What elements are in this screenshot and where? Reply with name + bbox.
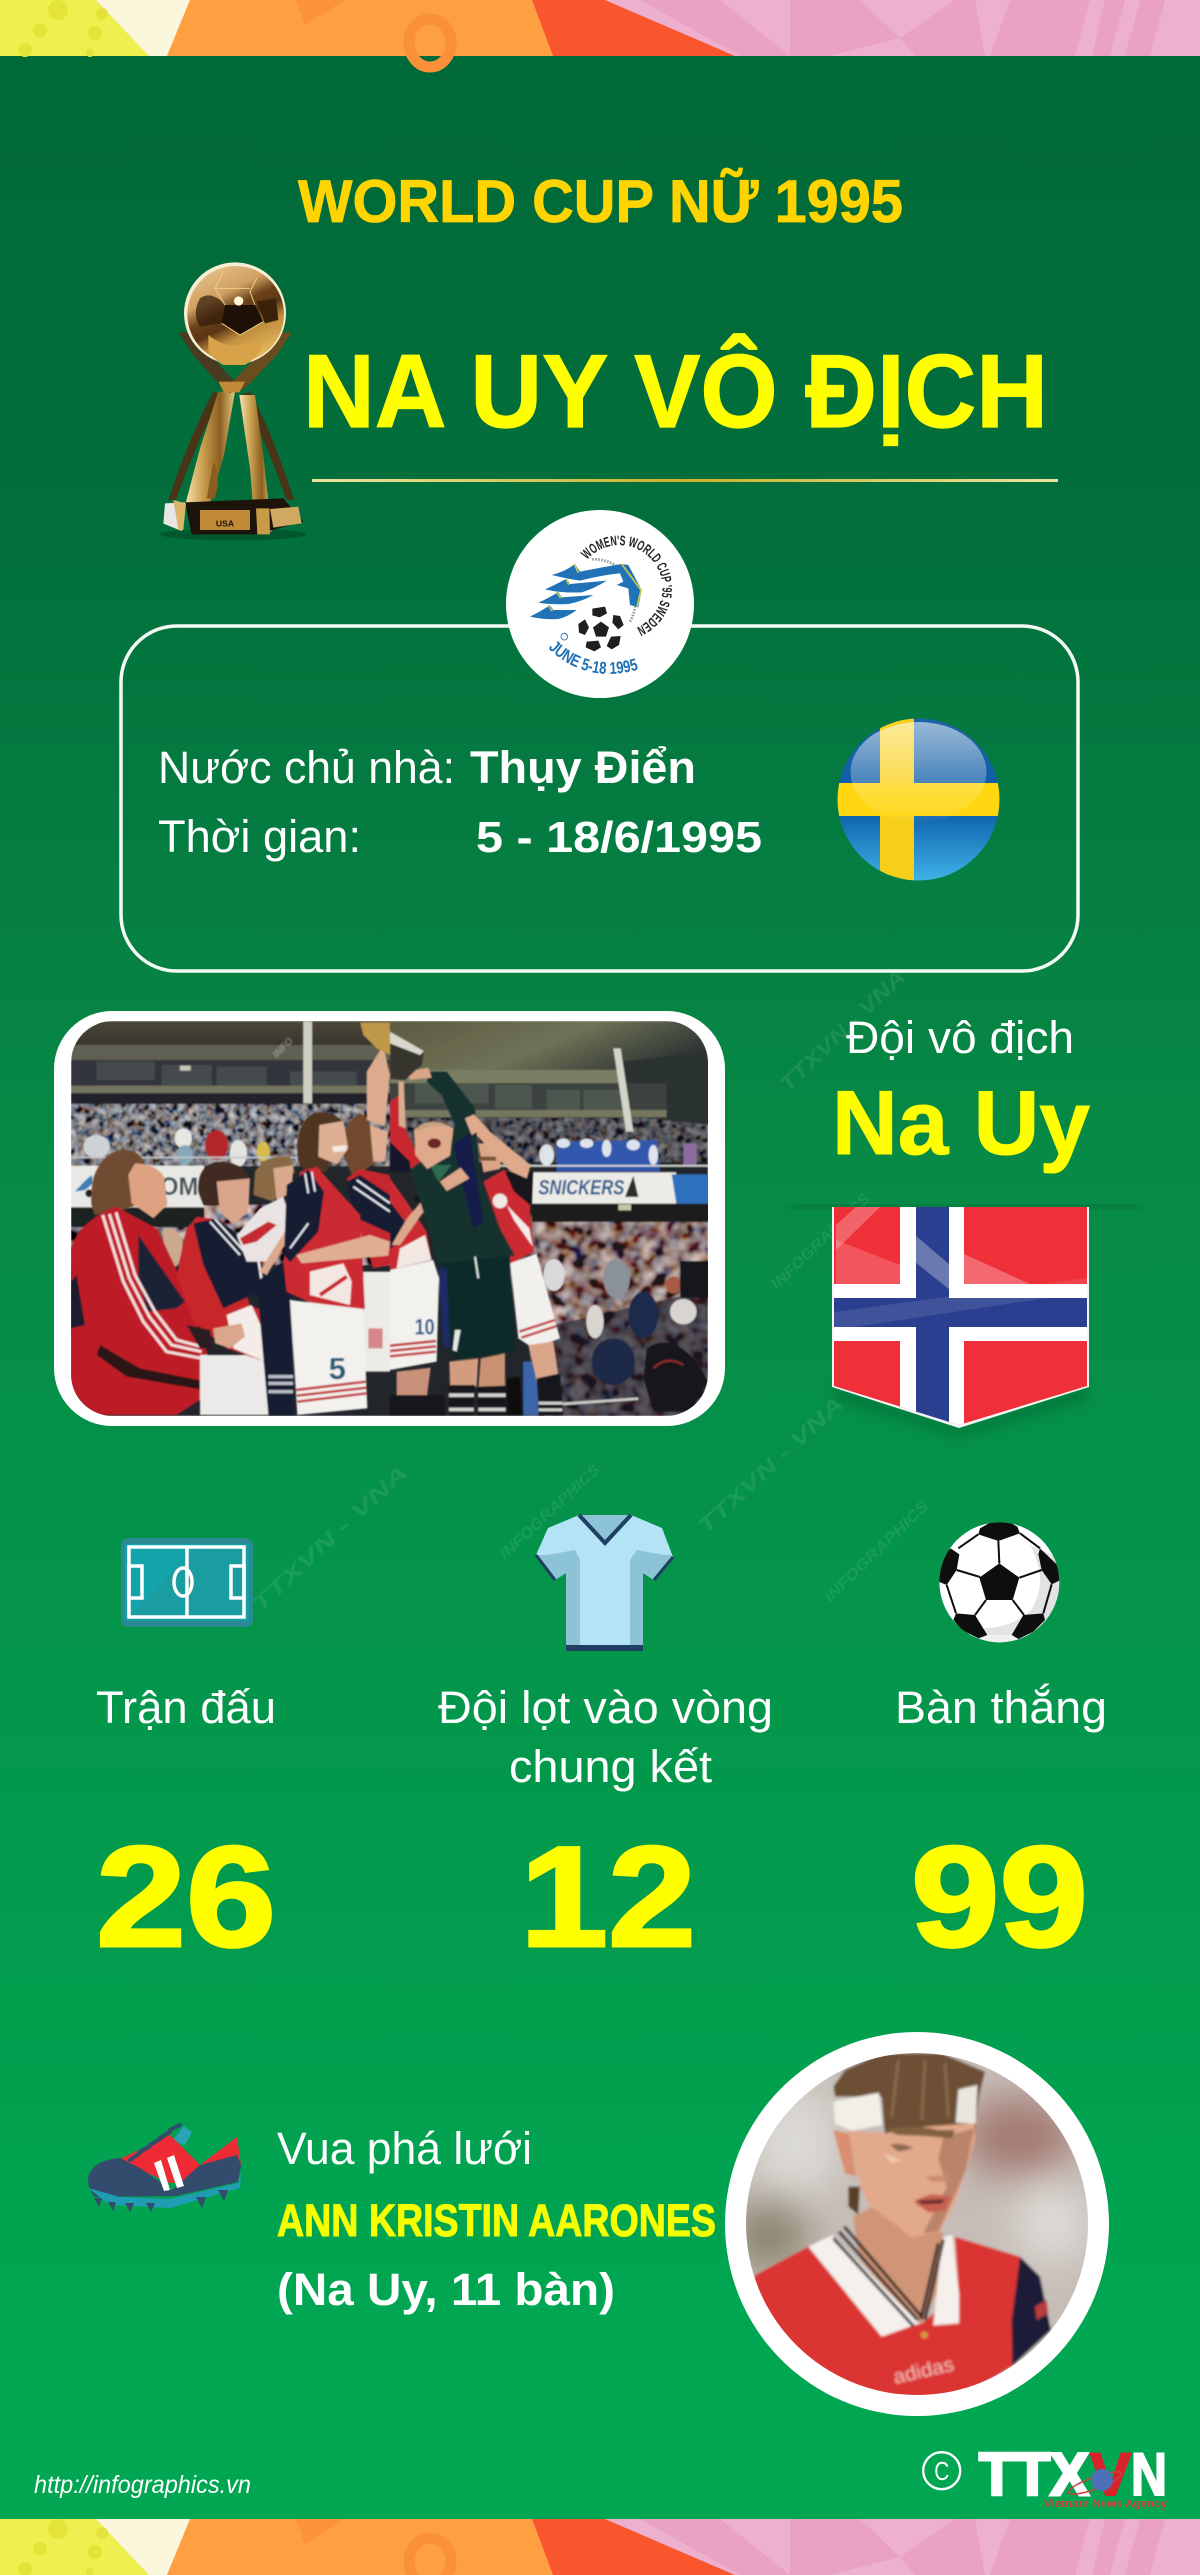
logo: Women's World Cup 1995 — [506, 510, 694, 698]
stat column: matches — [96, 1538, 276, 1977]
icon: golden trophy — [160, 262, 307, 540]
text: dates value: 5 - 18/6/1995 — [476, 813, 762, 862]
label: matches: Trận đấu — [96, 1682, 276, 1733]
panel: host and dates — [121, 626, 1078, 971]
logo: Women's World Cup 1995: JUNE 5-18 1995 — [549, 641, 638, 674]
photo: Norwegian team lifting the trophy — [54, 1011, 725, 1426]
watermarks: TTXVN - VNA — [248, 1461, 413, 1617]
player number 10: 10 — [415, 1314, 435, 1339]
logo: copyright TTXVN: V — [1090, 2441, 1131, 2508]
label: finalist teams: Đội lọt vào vòng — [438, 1682, 773, 1733]
player number 5 — [283, 1112, 390, 1415]
icon: Norway flag banner — [790, 1205, 1140, 1438]
text: champion name: Na Uy — [832, 1073, 1090, 1174]
top scorer block — [88, 2032, 1109, 2420]
logo: copyright TTXVN — [923, 2441, 1168, 2510]
watermarks: INFOGRAPHICS — [821, 1498, 932, 1606]
mini soccer ball pentagons — [578, 607, 624, 651]
ear — [833, 2130, 857, 2177]
number: 26 matches: 26 — [96, 1818, 276, 1977]
logo: copyright TTXVN: TTX — [979, 2441, 1089, 2508]
watermarks — [248, 965, 932, 1617]
text: host country label: Nước chủ nhà: — [158, 742, 455, 793]
logo: copyright TTXVN: C — [934, 2456, 949, 2486]
player behind with white shorts — [343, 1045, 390, 1372]
panel outline — [121, 626, 1078, 971]
icon: soccer ball — [938, 1522, 1061, 1645]
stat column: finalist teams — [438, 1515, 773, 1977]
team: right group — [390, 1032, 563, 1415]
watermarks: INFOGRAPHICS — [496, 1461, 604, 1563]
trophy top — [360, 1022, 390, 1055]
logo: copyright TTXVN: N — [1131, 2441, 1167, 2508]
top decorative strip — [0, 0, 1200, 67]
teammate behind raised hand — [236, 1156, 296, 1416]
title underline — [312, 479, 1058, 482]
hair — [833, 2053, 985, 2137]
photo: Ann Kristin Aarones — [725, 2032, 1109, 2420]
text: host country value: Thụy Điển — [470, 742, 696, 793]
text: top scorer name: ANN KRISTIN AARONES — [277, 2195, 716, 2246]
text: champion label: Đội vô địch — [846, 1012, 1074, 1063]
team: left group — [71, 1045, 390, 1415]
watermark on roof: INFO — [271, 1036, 296, 1060]
photo frame — [54, 1011, 725, 1426]
subtitle: World Cup nữ 1995: WORLD CUP NỮ 1995 — [298, 168, 903, 235]
teammate in navy and red — [177, 1162, 268, 1415]
number: 12 teams: 12 — [520, 1818, 696, 1977]
logo: copyright TTXVN: Vietnam News Agency — [1044, 2498, 1168, 2510]
man in red jacket — [71, 1149, 208, 1416]
neck — [853, 2207, 945, 2323]
icon: Sweden flag — [837, 718, 1001, 882]
text: website: http://infographics.vn — [34, 2471, 251, 2499]
stadium backdrop — [71, 1082, 708, 1416]
watermarks: INFOGRAPHICS — [768, 1190, 873, 1293]
watermarks: TTXVN - VNA — [775, 965, 910, 1097]
player number 10 — [390, 1082, 445, 1415]
label: goals: Bàn thắng — [895, 1682, 1107, 1733]
right player with red shirt — [465, 1115, 563, 1415]
watermarks: TTXVN - VNA — [694, 1392, 848, 1539]
stat column: goals — [895, 1522, 1107, 1977]
icon: football pitch — [121, 1538, 253, 1627]
jersey — [754, 2236, 1022, 2395]
stat column: finalist teams: chung kết — [509, 1741, 713, 1792]
title: Na Uy vô địch: NA UY VÔ ĐỊCH — [303, 333, 1048, 450]
goalkeeper — [406, 1068, 522, 1415]
icon: golden trophy: USA — [216, 519, 235, 529]
logo: Women's World Cup 1995: WOMEN'S WORLD CUP '95 SWEDEN — [580, 536, 672, 636]
icon: jersey — [536, 1515, 673, 1651]
photo: Ann Kristin Aarones: adidas — [891, 2354, 956, 2389]
text: dates label: Thời gian: — [158, 811, 361, 862]
text: top scorer team and goals: (Na Uy, 11 bàn) — [277, 2264, 615, 2315]
text: top scorer label: Vua phá lưới — [277, 2123, 532, 2174]
player number 5: 5 — [329, 1352, 346, 1386]
face — [848, 2123, 975, 2238]
headband — [833, 2093, 882, 2131]
icon: football boot — [88, 2125, 241, 2212]
bottom decorative strip — [0, 2519, 1200, 2575]
photo: Norwegian team lifting the trophy: SNICKERS — [538, 1175, 624, 1199]
number: 99 goals: 99 — [911, 1818, 1088, 1977]
photo: Norwegian team lifting the trophy: OM — [160, 1173, 198, 1201]
raised trophy bowl — [390, 1032, 424, 1080]
